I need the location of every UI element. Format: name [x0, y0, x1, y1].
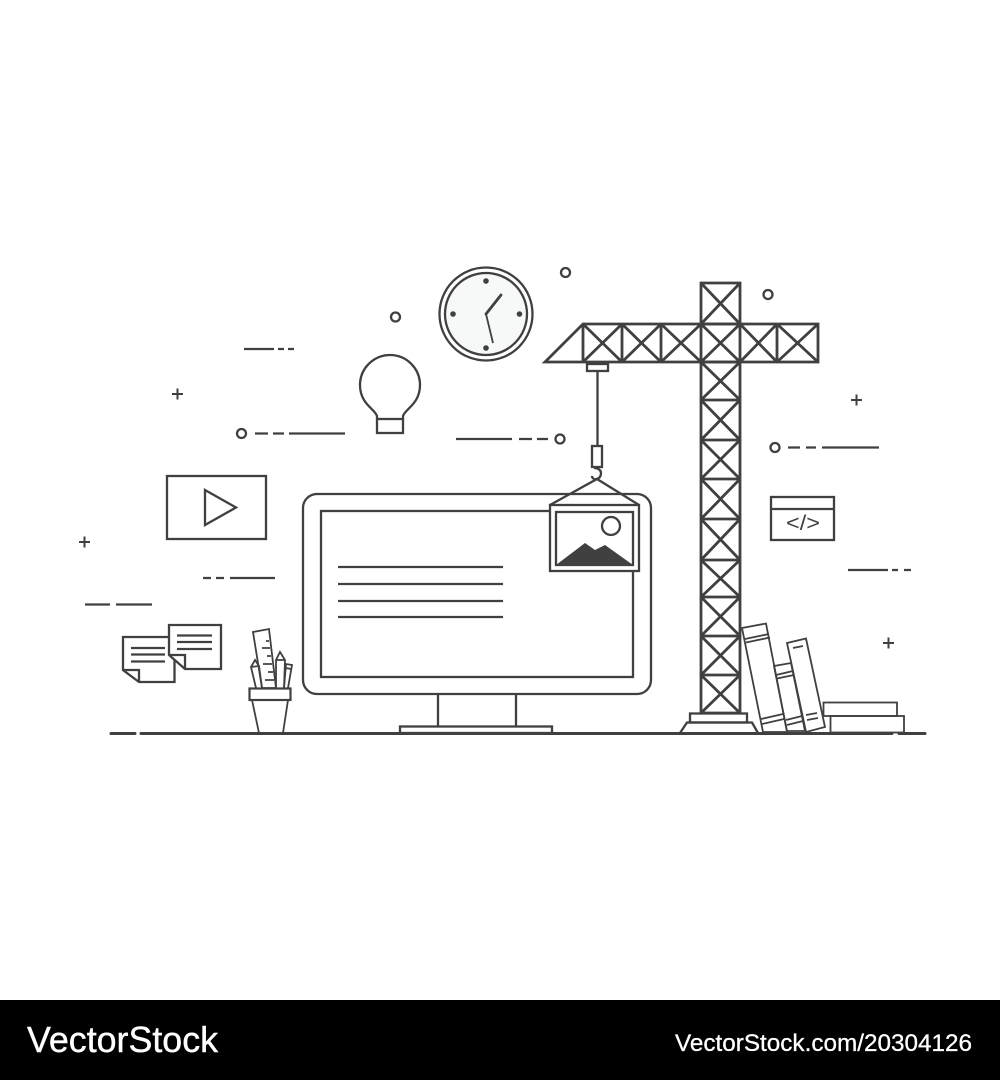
monitor body: [303, 494, 651, 694]
picture inner frame: [556, 512, 633, 565]
icon: light bulb: [360, 355, 420, 433]
ruler: [253, 629, 276, 688]
mountains: [556, 543, 633, 565]
computer monitor: [303, 494, 651, 733]
icon: code window: </>: [786, 512, 820, 535]
decorative dashes: [85, 349, 911, 604]
note left: [123, 637, 174, 682]
book leaning: [787, 638, 825, 732]
stacked flat books: [824, 702, 897, 716]
crane jib: [545, 324, 818, 362]
icon: video player: [167, 476, 266, 539]
decorative plus signs: [79, 388, 894, 648]
picture frame: [550, 505, 639, 571]
decorative circles: [237, 268, 780, 452]
crane tower: [701, 283, 740, 713]
footer image id: VectorStock.com/20304126: [675, 1030, 972, 1057]
icon: pencil pot: [250, 629, 292, 733]
sun: [602, 517, 620, 535]
crane base: [680, 714, 758, 733]
monitor stand: [400, 694, 552, 733]
note right: [169, 625, 221, 669]
footer bar: [0, 1000, 1000, 1080]
crane trolley and cable: [587, 364, 608, 479]
hanging picture: [550, 479, 639, 571]
icon: code window: [771, 497, 834, 540]
icon: books: [742, 624, 904, 732]
icon: sticky notes: [123, 625, 221, 682]
pencils: [251, 660, 262, 688]
ground line: [111, 732, 925, 735]
book short: [774, 663, 805, 731]
wall clock: [440, 268, 532, 360]
footer logo text: VectorStock: [27, 1019, 219, 1060]
sling: [550, 479, 639, 505]
book tall: [742, 624, 787, 732]
pot: [250, 688, 290, 700]
monitor screen: [321, 511, 633, 677]
screen text lines: [338, 567, 503, 617]
